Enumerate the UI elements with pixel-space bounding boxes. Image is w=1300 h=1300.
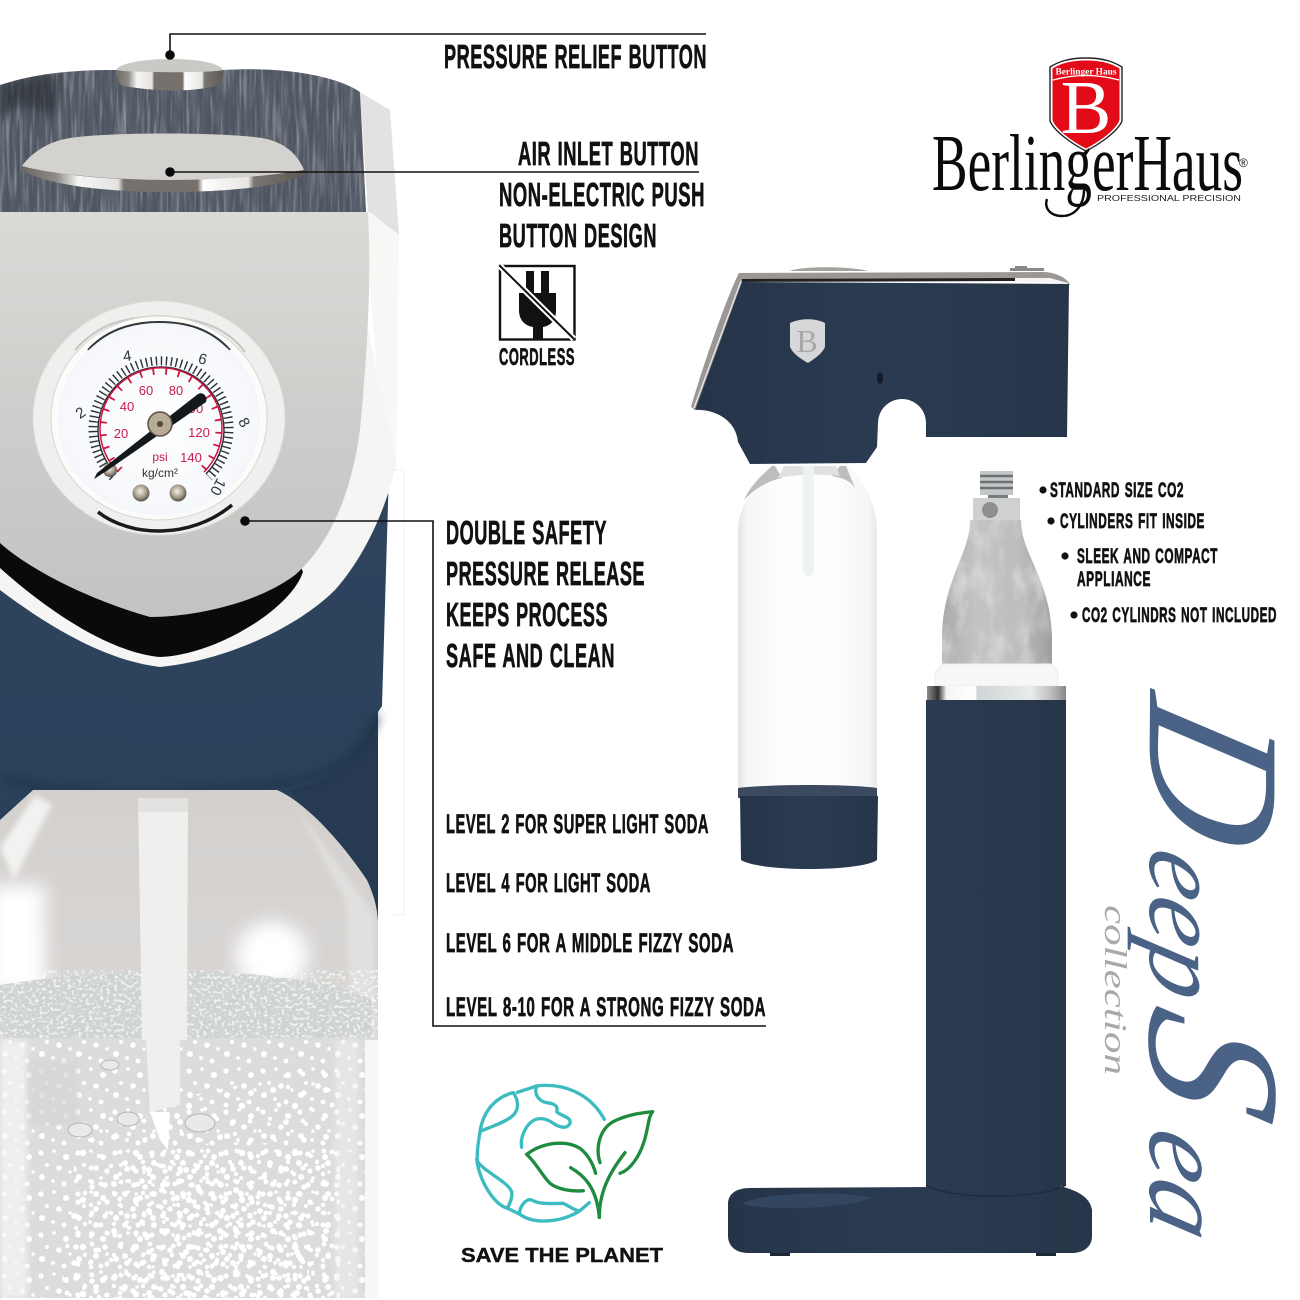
gauge: 90	[189, 401, 203, 416]
heading: pressure relief button: PRESSURE RELIEF BUTTON	[444, 38, 707, 75]
silver front plate with chrome rim	[0, 212, 396, 667]
text block: air inlet button: NON-ELECTRIC PUSH	[499, 176, 705, 213]
callout: air inlet leader line	[165, 167, 699, 177]
text block: carbonation levels: LEVEL 2 FOR SUPER LIGHT SODA	[446, 809, 709, 839]
icon: cordless crossed plug	[500, 266, 574, 340]
logo shield	[1050, 58, 1122, 151]
icon: pressure relief button	[115, 59, 224, 90]
panel: CO2 cylinder and column stand	[728, 471, 1092, 1256]
CO2 cylinder	[927, 471, 1066, 700]
gauge: 140	[180, 450, 202, 465]
callout: pressure relief leader line	[165, 34, 706, 60]
callout: safety and levels bracket line	[240, 516, 766, 1026]
label: save the planet: SAVE THE PLANET	[461, 1244, 664, 1267]
icon: air inlet button	[22, 134, 305, 192]
text block: CO2 feature bullets: APPLIANCE	[1077, 568, 1151, 591]
text block: double safety: SAFE AND CLEAN	[446, 637, 615, 674]
text block: double safety	[446, 514, 645, 674]
gauge: 8	[234, 415, 253, 431]
text block: double safety: DOUBLE SAFETY	[446, 514, 607, 551]
icon: metal B badge: B	[796, 323, 818, 359]
text block: carbonation levels: LEVEL 8-10 FOR A STRONG FIZZY SODA	[446, 992, 766, 1022]
gauge: 60	[139, 383, 153, 398]
text block: carbonation levels	[446, 809, 766, 1022]
gauge: psi	[152, 450, 168, 464]
text block: air inlet button: BUTTON DESIGN	[499, 217, 657, 254]
logo tagline: PROFESSIONAL PRECISION	[1097, 194, 1241, 203]
navy body with collar	[0, 470, 389, 920]
subtitle: collection: collection	[1098, 905, 1134, 1075]
text block: double safety: KEEPS PROCESS	[446, 596, 608, 633]
gauge: 4	[122, 347, 133, 365]
gauge	[33, 301, 285, 535]
logo: Berlinger Haus	[932, 58, 1248, 216]
icon: save the planet globe and leaf	[477, 1085, 653, 1221]
text block: double safety: PRESSURE RELEASE	[446, 555, 645, 592]
gauge: 6	[196, 350, 209, 369]
title: Deep Sea script: eep	[1126, 839, 1243, 1014]
panel: close-up soda maker photo	[0, 59, 404, 1300]
text block: air inlet button: AIR INLET BUTTON	[518, 135, 699, 172]
text block: carbonation levels: LEVEL 6 FOR A MIDDLE FIZZY SODA	[446, 928, 734, 958]
gauge: 20	[114, 426, 128, 441]
text block: carbonation levels: LEVEL 4 FOR LIGHT SODA	[446, 868, 651, 898]
text block: CO2 feature bullets: STANDARD SIZE CO2	[1050, 479, 1184, 502]
label: cordless: CORDLESS	[499, 344, 575, 371]
logo shield: Berlinger Haus	[1056, 68, 1117, 78]
panel: clear bottle with navy cup	[738, 465, 878, 869]
text block: CO2 feature bullets	[1039, 479, 1277, 627]
gauge: 120	[188, 425, 210, 440]
gauge: 10	[206, 475, 229, 498]
logo shield: B	[1061, 66, 1111, 150]
gauge: 40	[120, 399, 134, 414]
water bottle with bubbles	[0, 790, 378, 1300]
text block: air inlet button	[499, 135, 705, 254]
column and base	[728, 700, 1092, 1253]
gauge: 2	[73, 404, 89, 423]
icon: metal B badge	[790, 319, 825, 363]
device top wood panel	[0, 60, 399, 470]
title: Deep Sea script: ea	[1125, 1119, 1247, 1253]
panel: soda maker head	[691, 266, 1070, 464]
logo registered mark: ®	[1239, 156, 1248, 170]
gauge: kg/cm²	[142, 466, 178, 480]
gauge: 80	[169, 383, 183, 398]
